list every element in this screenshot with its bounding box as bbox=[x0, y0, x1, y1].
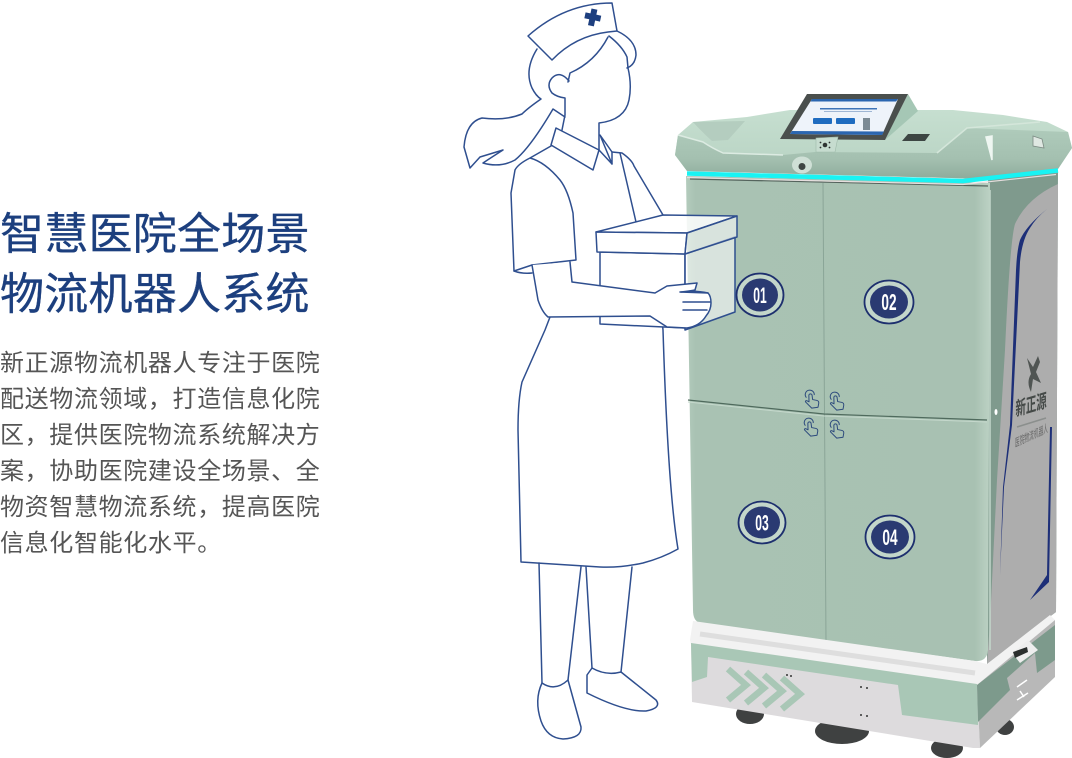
wheels bbox=[736, 704, 1014, 758]
base chevrons bbox=[728, 669, 800, 709]
title bbox=[0, 210, 310, 319]
robot top lid bbox=[675, 110, 1072, 184]
title: 物流机器人系统 bbox=[0, 270, 310, 319]
door badges bbox=[736, 274, 914, 558]
badge 03 bbox=[738, 502, 786, 544]
description text: 新正源物流机器人专注于医院 bbox=[0, 350, 320, 377]
title: 智慧医院全场景 bbox=[0, 210, 310, 259]
nurse illustration bbox=[464, 3, 737, 739]
description text: 配送物流领域，打造信息化院 bbox=[0, 386, 320, 413]
badge 02: 02 bbox=[881, 291, 897, 316]
card reader bbox=[902, 134, 930, 141]
uniform sleeve and torso bbox=[511, 146, 663, 273]
camera dome bbox=[792, 156, 812, 174]
cabinet doors bbox=[686, 176, 990, 661]
badge 02 bbox=[864, 280, 914, 324]
touch screen bbox=[780, 94, 918, 152]
badge 04: 04 bbox=[882, 525, 898, 550]
box bbox=[596, 215, 737, 330]
description text: 区，提供医院物流系统解决方 bbox=[0, 422, 320, 449]
side logo: 新正源 bbox=[1016, 388, 1047, 421]
badge 01: 01 bbox=[753, 283, 767, 308]
description text bbox=[0, 350, 320, 557]
touch hand icons bbox=[804, 390, 844, 438]
cyan light strip bbox=[687, 170, 1058, 181]
robot bbox=[675, 94, 1072, 758]
badge 01 bbox=[736, 274, 784, 316]
uniform collar bbox=[551, 128, 612, 170]
nurse cap bbox=[528, 3, 617, 60]
badge 03: 03 bbox=[755, 511, 769, 535]
description text: 物资智慧物流系统，提高医院 bbox=[0, 494, 320, 521]
arm and hand bbox=[532, 262, 711, 328]
shoes bbox=[538, 668, 658, 739]
badge 04 bbox=[866, 516, 914, 558]
robot side panel bbox=[987, 170, 1058, 664]
hair and face bbox=[464, 31, 636, 168]
side logo bbox=[1015, 356, 1048, 450]
robot base bbox=[690, 615, 1055, 748]
dress and legs bbox=[518, 317, 678, 683]
description text: 信息化智能化水平。 bbox=[0, 530, 222, 557]
description text: 案，协助医院建设全场景、全 bbox=[0, 458, 320, 485]
side logo: 医院物流机器人 bbox=[1015, 420, 1048, 450]
screen camera mount bbox=[816, 137, 838, 152]
